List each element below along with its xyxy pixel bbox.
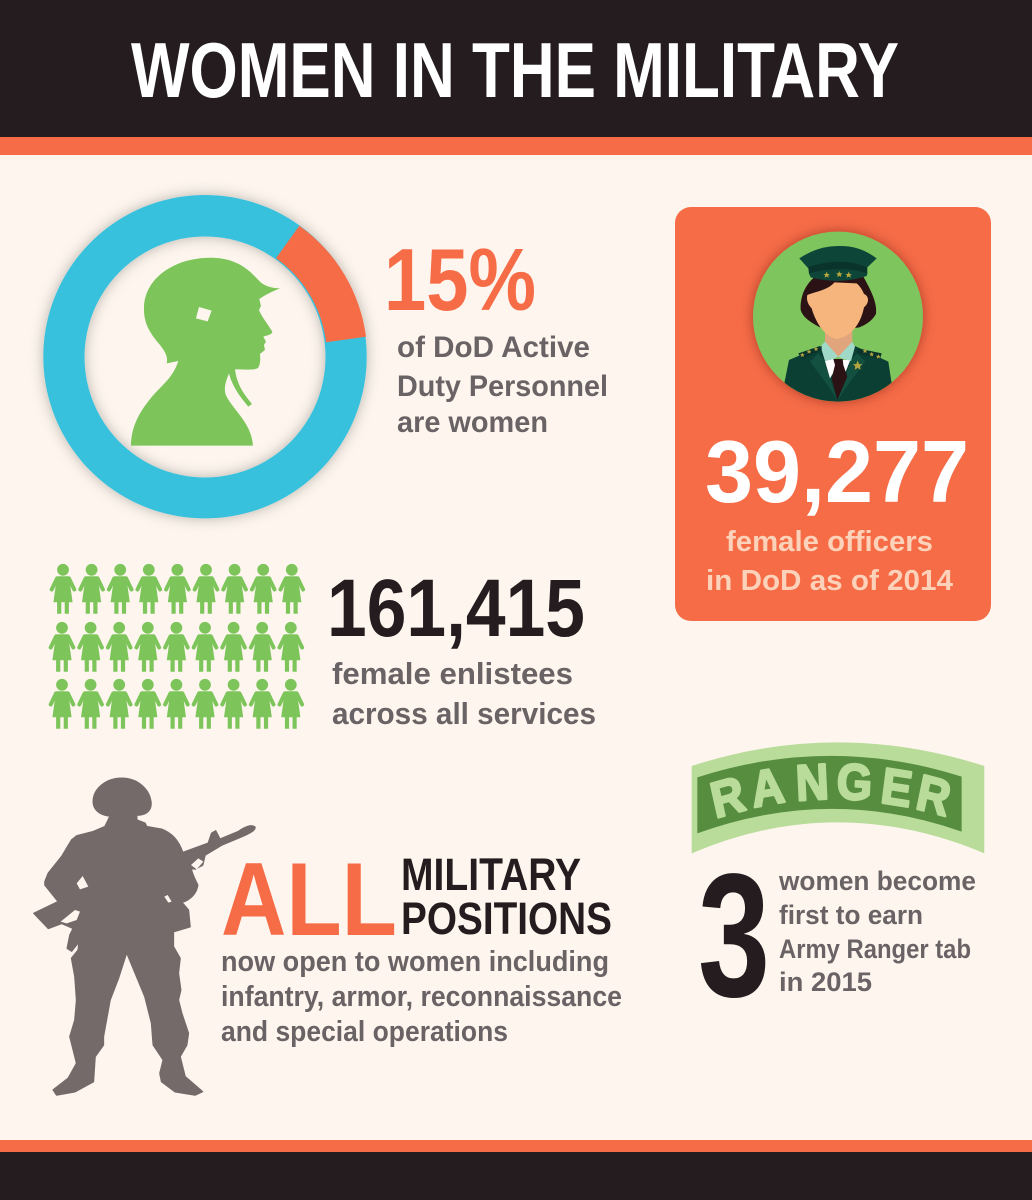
- text: army ranger description: in 2015: [779, 967, 872, 997]
- text: army ranger description: first to earn: [779, 900, 923, 930]
- icon: ranger tab: [692, 742, 984, 853]
- panel: female officers: [675, 207, 991, 621]
- text: positions description: and special operations: [221, 1016, 508, 1048]
- icon: female officer portrait: [753, 232, 923, 407]
- text: positions description: infantry, armor, reconnaissance: [221, 981, 622, 1013]
- text: female enlistees description: across all services: [332, 696, 596, 731]
- footer band: [0, 1140, 1032, 1200]
- donut chart: 15 percent: [43, 195, 367, 518]
- heading: military positions: POSITIONS: [401, 893, 612, 944]
- stat: 3: 3: [698, 838, 770, 1034]
- text: positions description: [221, 946, 622, 1048]
- icon: ranger tab: RANGER: [706, 753, 956, 830]
- text: female officers description: female officers: [726, 526, 933, 558]
- stat: 39,277: 39,277: [705, 422, 969, 521]
- heading: military positions: [401, 849, 612, 944]
- icon: woman soldier head silhouette: [131, 258, 280, 446]
- pictogram: rows of women figures: [51, 564, 303, 729]
- text: DoD active duty description: are women: [397, 406, 548, 439]
- header band: [0, 0, 1032, 155]
- text: army ranger description: Army Ranger tab: [779, 934, 971, 964]
- text: female enlistees description: female enlistees: [332, 656, 573, 691]
- heading: ALL: ALL: [221, 842, 397, 958]
- stat: 15 percent: 15%: [384, 230, 536, 329]
- text: positions description: now open to women including: [221, 946, 609, 978]
- text: DoD active duty description: Duty Personnel: [397, 370, 608, 403]
- text: female officers description: in DoD as of 2014: [706, 565, 953, 597]
- text: female enlistees description: [332, 656, 596, 731]
- text: army ranger description: women become: [778, 866, 976, 896]
- heading: military positions: MILITARY: [401, 849, 581, 900]
- text: DoD active duty description: of DoD Active: [397, 331, 590, 364]
- text: female officers description: [706, 526, 953, 597]
- icon: soldier silhouette with rifle: [34, 778, 255, 1095]
- stat: 161,415: 161,415: [327, 563, 585, 654]
- text: army ranger description: [778, 866, 976, 997]
- text: DoD active duty description: [397, 331, 608, 439]
